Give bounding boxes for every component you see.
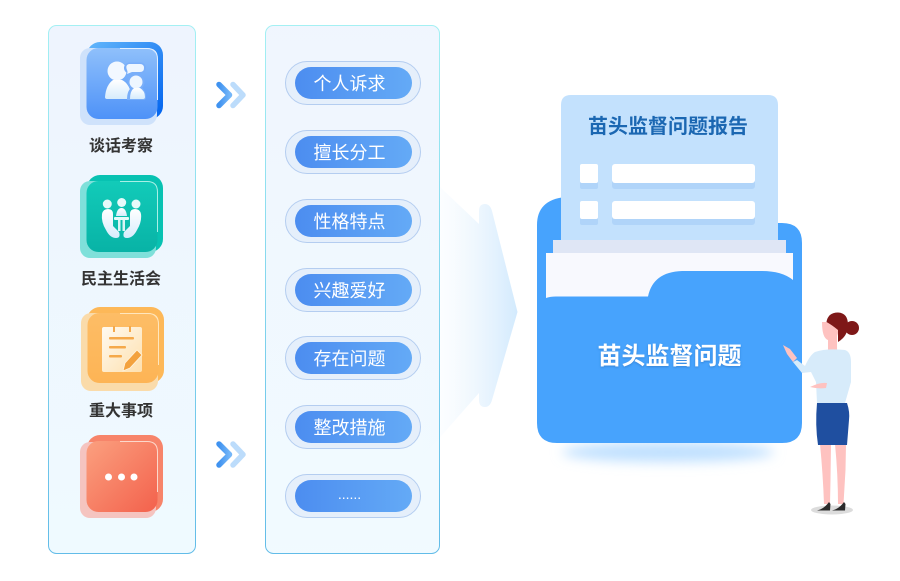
- folder label: 苗头监督问题: [598, 343, 742, 370]
- pill: 整改措施: [286, 406, 420, 448]
- report sheet: [561, 95, 778, 245]
- report title: 苗头监督问题报告: [588, 115, 748, 138]
- pill: 整改措施: 整改措施: [314, 418, 386, 438]
- panel: report content: [266, 26, 440, 554]
- pill: 擅长分工: [286, 130, 420, 174]
- pill: more: [286, 474, 420, 518]
- sweater: [793, 349, 851, 403]
- big transition arrow: [420, 168, 518, 460]
- pill: 兴趣爱好: [286, 268, 420, 312]
- hands: [783, 345, 797, 362]
- folder back: [537, 197, 802, 340]
- label: 重大事项: 重大事项: [89, 401, 153, 420]
- arrow: lower chevrons: [219, 444, 243, 465]
- icon: conversation review: [80, 42, 163, 125]
- neck and face: [822, 322, 842, 350]
- pill: 存在问题: [286, 336, 420, 380]
- pill: 性格特点: [286, 200, 420, 242]
- pill: 性格特点: 性格特点: [314, 212, 386, 232]
- folder with report: [537, 95, 802, 462]
- panel: sources: [48, 26, 196, 554]
- hair: [826, 312, 848, 342]
- illustration: presenting woman: [783, 312, 859, 514]
- shoes: [817, 502, 830, 510]
- icon: democratic meeting: [80, 175, 163, 258]
- pill: 存在问题: 存在问题: [314, 349, 386, 369]
- skirt: [816, 403, 849, 445]
- pill: 擅长分工: 擅长分工: [314, 143, 386, 163]
- pill: 个人诉求: [286, 62, 420, 104]
- pill: more: ......: [338, 486, 361, 502]
- arrow: upper chevrons: [219, 84, 243, 106]
- pill: 个人诉求: 个人诉求: [314, 74, 386, 94]
- pill: 兴趣爱好: 兴趣爱好: [314, 281, 386, 301]
- label: 谈话考察: 谈话考察: [89, 136, 153, 155]
- floor shadow: [811, 506, 853, 514]
- icon: major matters: [81, 307, 164, 391]
- icon: more items: [80, 435, 163, 518]
- label: 民主生活会: 民主生活会: [81, 269, 161, 288]
- legs: [820, 444, 831, 504]
- folder shadow: [562, 442, 774, 462]
- inner sheets: [553, 240, 786, 256]
- folder front: [537, 271, 802, 443]
